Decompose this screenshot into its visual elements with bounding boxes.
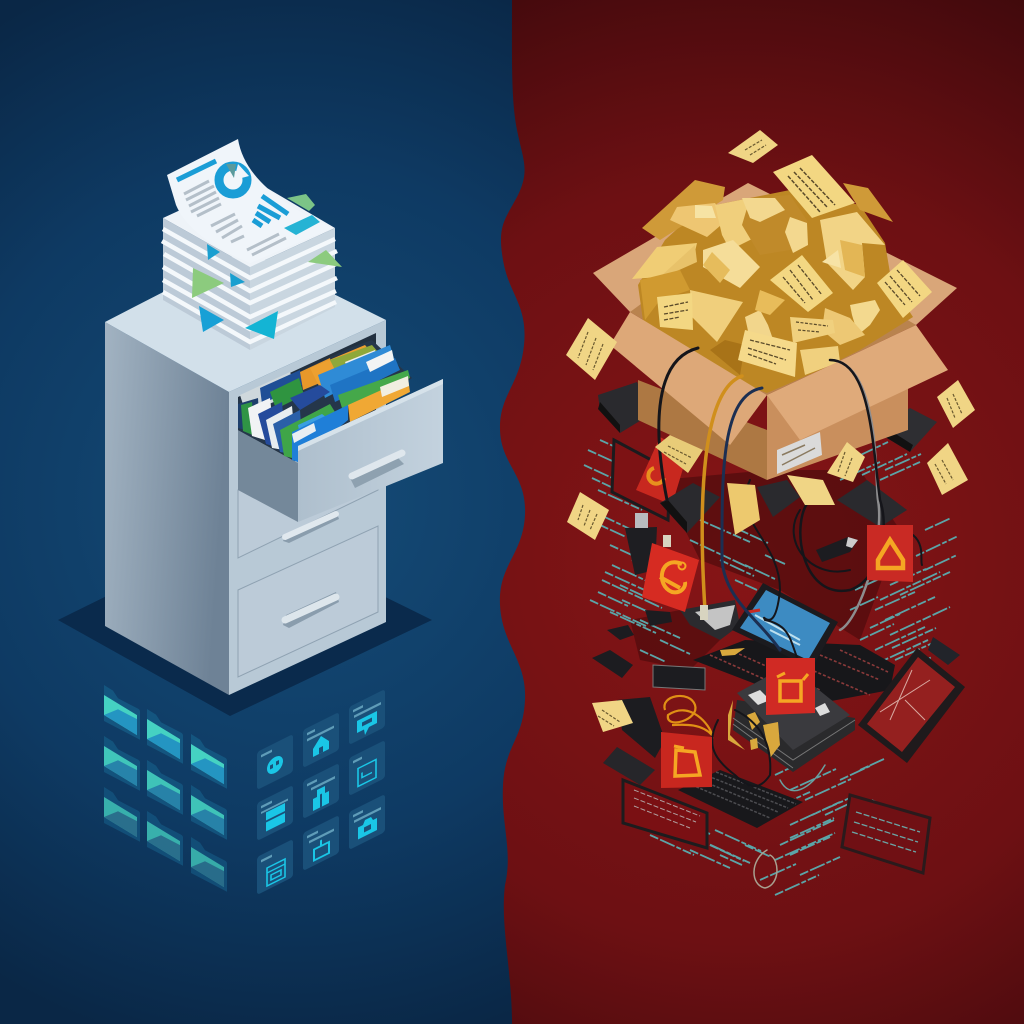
card: camera xyxy=(349,794,385,850)
cables xyxy=(659,348,922,888)
data card icon grid xyxy=(257,689,385,895)
folder xyxy=(104,736,140,791)
paper stack xyxy=(162,139,342,350)
card: box xyxy=(303,815,339,871)
tablet bottom right xyxy=(842,795,930,873)
card: building xyxy=(303,763,339,819)
plug ends xyxy=(663,535,708,620)
small black devices xyxy=(592,610,705,785)
red tag with house icon xyxy=(867,525,913,582)
card: window xyxy=(257,839,293,895)
black hubs under box xyxy=(660,480,907,533)
crumpled paper mass xyxy=(632,180,913,393)
tablet bottom left xyxy=(623,780,707,848)
open drawer side xyxy=(238,430,298,522)
silver device xyxy=(680,600,740,640)
cabinet left face xyxy=(105,322,229,695)
open drawer front panel xyxy=(298,379,443,522)
red tag with square icon xyxy=(766,658,815,715)
box left wall xyxy=(638,380,767,480)
report title bar xyxy=(177,161,216,180)
USB stick xyxy=(625,513,657,575)
card: database xyxy=(257,785,293,841)
black vent card xyxy=(928,637,960,665)
card: house xyxy=(303,712,339,768)
bar chart icon xyxy=(253,196,288,226)
cabinet right face xyxy=(229,320,386,695)
black device under box left xyxy=(598,382,653,433)
sticky notes in box xyxy=(657,155,932,377)
folder xyxy=(191,734,227,789)
loose sticky notes xyxy=(566,130,975,732)
box right wall xyxy=(767,340,908,480)
card: speech bubble xyxy=(349,689,385,745)
cardboard box xyxy=(593,155,957,480)
crumpled yellow scraps xyxy=(720,648,780,758)
middle drawer xyxy=(238,426,378,558)
tangled orange wire xyxy=(664,696,712,735)
drawer opening xyxy=(238,333,376,490)
bottom black keyboard xyxy=(678,770,803,828)
red tag with circle icon xyxy=(642,543,699,612)
card: screen xyxy=(349,740,385,796)
bottom drawer xyxy=(238,526,378,677)
box front left flap xyxy=(610,312,767,445)
top red tag xyxy=(636,437,688,505)
stacked hard drive xyxy=(733,665,855,772)
green tab xyxy=(287,194,315,211)
cabinet floor shadow xyxy=(58,528,432,716)
USB dongle right xyxy=(816,537,858,562)
folder xyxy=(147,811,183,866)
box back flaps xyxy=(593,183,957,325)
folder icon grid xyxy=(104,685,227,892)
shipping label xyxy=(777,432,822,474)
back tablet left xyxy=(612,440,670,520)
code fragments xyxy=(584,440,958,895)
red tablet right xyxy=(858,648,965,763)
report text lines xyxy=(184,181,286,255)
folder xyxy=(147,760,183,815)
triangle markers xyxy=(192,244,342,339)
folder xyxy=(191,837,227,892)
cyan block xyxy=(284,215,320,235)
folder xyxy=(191,785,227,840)
box front right flap xyxy=(767,325,948,440)
dark red debris patch xyxy=(630,470,900,670)
red tag with D icon xyxy=(661,732,712,788)
black keyboard middle xyxy=(693,640,895,705)
pie chart icon xyxy=(219,164,249,194)
folder xyxy=(147,709,183,764)
blue laptop screen xyxy=(732,583,838,668)
card: gear xyxy=(257,734,293,790)
folders in drawer xyxy=(238,340,412,462)
cabinet top face xyxy=(105,250,386,392)
folder xyxy=(104,787,140,842)
filing cabinet xyxy=(105,250,443,695)
top report sheet xyxy=(167,139,333,263)
red background with wavy edge xyxy=(500,0,1024,1024)
black device under box right xyxy=(877,408,937,452)
folder xyxy=(104,685,140,740)
